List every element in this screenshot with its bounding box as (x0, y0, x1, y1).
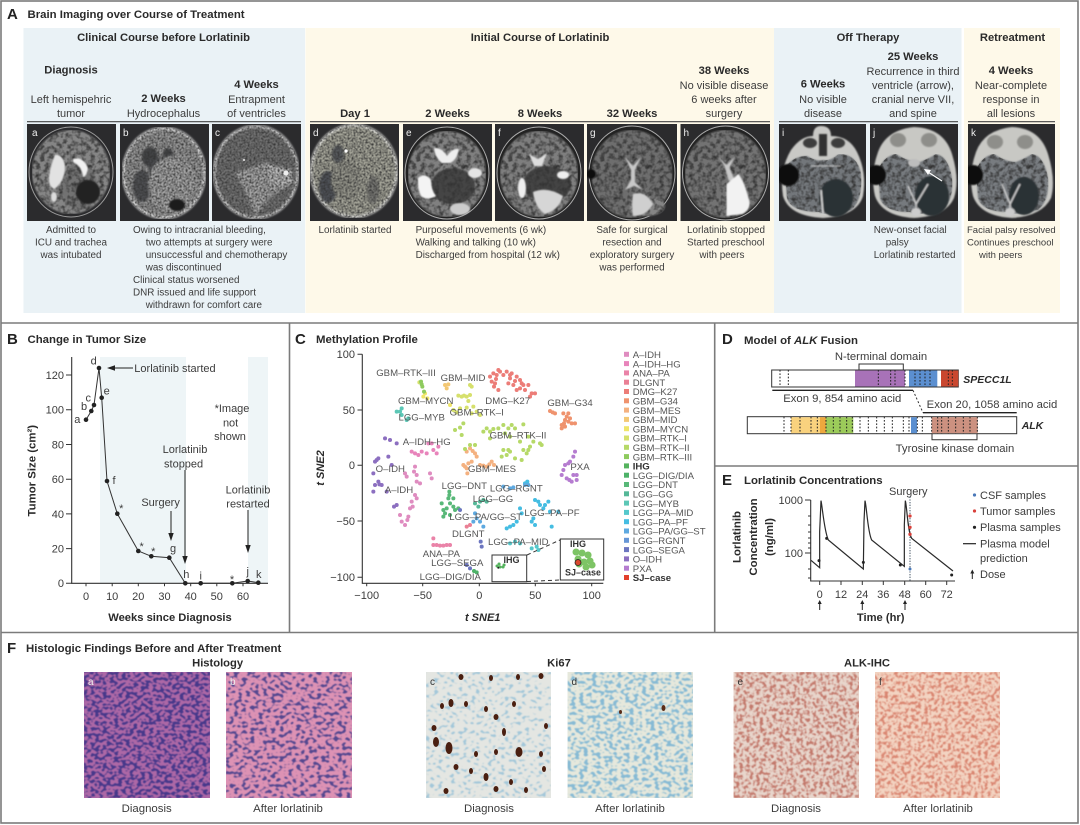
note: image not shown (214, 403, 249, 443)
line chart: tumor size over weeks: 20 (52, 544, 64, 556)
cluster labels: LGG–GG (473, 494, 513, 505)
legend: tumor classes: LGG–PA–PF (633, 517, 688, 528)
group titles: Ki67 (547, 658, 571, 670)
cluster labels: GBM–RTK–II (490, 430, 546, 442)
captions under scans: Lorlatinib restarted (874, 250, 955, 261)
panel F heading: Histologic Findings Before and After Treatment (26, 643, 281, 655)
line chart: tumor size over weeks: 80 (52, 440, 64, 452)
line chart: tumor size over weeks: 30 (158, 591, 171, 603)
micrograph a (84, 672, 210, 798)
column headers: 6 weeks after (691, 94, 757, 106)
legend: tumor classes: ANA–PA (633, 369, 670, 380)
cluster labels: GBM–RTK–I (450, 408, 504, 418)
annotation: lorlatinib restarted (226, 484, 270, 553)
line chart: tumor size over weeks: i (199, 570, 202, 582)
scan i (779, 124, 866, 221)
panel E: lorlatinib concentrations (722, 472, 1061, 624)
line chart: tumor size over weeks (46, 356, 268, 603)
micrograph b (226, 672, 352, 798)
panel B heading (7, 331, 146, 348)
shaded treatment periods (100, 357, 268, 583)
band: clinical course before lorlatinib (24, 28, 305, 313)
cluster labels: LGG–SEGA (431, 558, 484, 569)
line chart: tumor size over weeks: 0 (83, 591, 89, 603)
scatter plot axes: 50 (343, 405, 355, 417)
scan j with arrow: j (872, 128, 875, 139)
line chart: tumor size over weeks: f (112, 475, 116, 487)
legend: tumor classes: PXA (633, 564, 652, 575)
column headers: tumor (57, 108, 85, 120)
column headers: 6 Weeks (801, 78, 845, 90)
column headers: Near-complete (975, 80, 1047, 92)
line chart: tumor size over weeks: h (183, 569, 189, 581)
scan i: i (782, 128, 784, 139)
legend: tumor classes: SJ–case (633, 573, 671, 584)
cluster labels: DLGNT (452, 529, 485, 540)
note: image not shown: *Image (215, 403, 249, 415)
scatter plot axes: 100 (583, 590, 601, 602)
cluster labels (376, 368, 593, 583)
group titles: ALK-IHC (844, 658, 890, 670)
note: image not shown: not (223, 418, 238, 430)
panel B: change in tumor size (7, 331, 270, 624)
legend: sample types: prediction (980, 553, 1028, 565)
line chart: tumor size over weeks: 60 (52, 474, 64, 486)
captions under scans: unsuccessful and chemotherapy (146, 250, 287, 261)
scatter plot axes: 0 (476, 590, 482, 602)
captions under scans: withdrawn for comfort care (145, 300, 263, 311)
annotation: lorlatinib restarted: restarted (226, 498, 270, 510)
panel A heading: A (7, 6, 18, 23)
group titles: Histology (192, 658, 244, 670)
cluster labels: A–IDH–HG (403, 437, 451, 448)
N-terminal domain label and bracket (835, 351, 927, 370)
line chart: tumor size over weeks: 0 (58, 578, 64, 590)
legend: sample types: Tumor samples (980, 506, 1056, 518)
exon 9 label and fusion line (772, 390, 923, 413)
micrograph e: ALK-IHC diagnosis (734, 672, 859, 798)
captions under scans: DNR issued and life support (133, 288, 256, 298)
captions under scans: with peers (978, 250, 1023, 261)
legend: tumor classes (624, 350, 706, 584)
band: retreatment (964, 28, 1060, 313)
column headers: cranial nerve VII, (872, 94, 954, 106)
surgery label: Surgery (889, 486, 928, 498)
cluster labels: GBM–MES (468, 464, 516, 475)
tyrosine kinase domain label and bracket (896, 434, 1014, 455)
captions under scans: Owing to intracranial bleeding, (133, 225, 266, 236)
annotation: surgery: Surgery (141, 497, 180, 509)
scatter points by tumor class (373, 370, 577, 572)
concentration chart axes: 100 (785, 548, 803, 560)
line chart: tumor size over weeks: 10 (106, 591, 118, 603)
scan d: d (313, 128, 319, 139)
axis title: t SNE2: t SNE2 (315, 450, 327, 486)
line chart: tumor size over weeks: 20 (132, 591, 144, 603)
captions under scans: Continues preschool (967, 238, 1054, 248)
micrograph b: b (230, 677, 236, 688)
scatter plot axes: 0 (349, 460, 355, 472)
column headers: disease (804, 108, 842, 120)
scatter plot axes: 100 (337, 349, 355, 361)
scan f: f (498, 128, 501, 139)
column headers: Left hemispehric (31, 94, 112, 106)
band headings: Initial Course of Lorlatinib (471, 32, 609, 44)
scan j with arrow (870, 124, 958, 221)
captions under scans: Admitted to (46, 225, 96, 236)
inset: enlarged IHG with SJ-case: SJ–case (565, 568, 601, 578)
cluster labels: O–IDH (376, 464, 405, 475)
legend: tumor classes: GBM–MES (633, 406, 681, 417)
cluster labels: LGG–PA/GG–ST (449, 512, 522, 523)
cluster labels: LGG–PA–MID (488, 537, 549, 548)
column headers: Day 1 (340, 108, 370, 120)
scan e: e (406, 128, 412, 139)
note: image not shown: shown (214, 431, 246, 443)
captions under scans (35, 225, 1056, 311)
concentration chart axes: 0 (817, 589, 823, 601)
panel F: histologic findings (7, 640, 1001, 815)
band: off therapy (774, 28, 962, 313)
panel D: model of ALK fusion (722, 331, 1057, 455)
micrograph captions: Diagnosis (464, 803, 514, 815)
micrograph captions: After lorlatinib (595, 803, 665, 815)
captions under scans: Walking and talking (10 wk) (416, 238, 536, 248)
legend: sample types: CSF samples (980, 490, 1047, 502)
captions under scans: Purposeful movements (6 wk) (416, 225, 546, 236)
captions under scans: Lorlatinib stopped (687, 225, 765, 236)
legend: tumor classes: GBM–RTK–I (633, 434, 687, 445)
micrograph a: a (88, 677, 94, 688)
column headers: 2 Weeks (425, 108, 470, 120)
band: initial course of lorlatinib (306, 28, 774, 313)
captions under scans: was discontinued (145, 262, 221, 274)
ALK gene bar (747, 417, 1017, 434)
panel C heading: Methylation Profile (316, 334, 418, 346)
line chart: tumor size over weeks: * (119, 503, 124, 515)
concentration chart axes (779, 495, 955, 601)
panel E heading: E (722, 472, 732, 489)
column headers: of ventricles (227, 108, 286, 120)
band headings (77, 32, 1045, 44)
panel B heading: B (7, 331, 18, 348)
captions under scans: two attempts at surgery were (146, 238, 273, 248)
column headers (31, 51, 1047, 120)
scatter plot axes: −50 (413, 590, 432, 602)
column headers: surgery (706, 108, 743, 120)
annotation: lorlatinib restarted: Lorlatinib (226, 484, 270, 496)
captions under scans: ICU and trachea (35, 238, 107, 248)
cluster labels: PXA (570, 462, 590, 473)
inset: IHG cluster: IHG (504, 555, 520, 565)
captions under scans: resection and (602, 238, 662, 248)
scan k: k (971, 128, 977, 139)
line chart: tumor size over weeks: * (140, 541, 145, 553)
column headers: response in (983, 94, 1039, 106)
legend: tumor classes: LGG–GG (633, 490, 673, 500)
micrograph captions: Diagnosis (771, 803, 821, 815)
micrograph captions: After lorlatinib (253, 803, 323, 815)
panel C: methylation profile (295, 331, 706, 624)
legend: tumor classes: GBM–MYCN (633, 424, 688, 435)
scan g: g (590, 128, 596, 139)
legend: tumor classes: LGG–RGNT (633, 536, 686, 547)
cluster labels: GBM–MID (441, 373, 485, 384)
panel A heading (7, 6, 245, 23)
column headers: all lesions (987, 108, 1036, 120)
cluster labels: ANA–PA (423, 549, 460, 560)
concentration chart axes: 60 (920, 589, 932, 601)
line chart: tumor size over weeks: 60 (237, 591, 249, 603)
y axis title: (ng/ml) (764, 518, 776, 556)
captions under scans: was intubated (40, 250, 101, 261)
column headers: 32 Weeks (607, 108, 657, 120)
micrograph e: ALK-IHC diagnosis: e (738, 677, 744, 688)
column headers: Entrapment (228, 94, 285, 106)
panel C heading: C (295, 331, 306, 348)
legend: sample types (963, 490, 1061, 581)
band headings: Off Therapy (837, 32, 900, 44)
panel E heading (722, 472, 883, 489)
legend: sample types: Dose (980, 569, 1006, 581)
legend: tumor classes: GBM–G34 (633, 396, 679, 408)
y axis title (732, 498, 776, 576)
legend: sample types: Plasma model (980, 538, 1050, 550)
micrograph f: ALK-IHC after lorlatinib: f (879, 677, 882, 688)
axis title: weeks since diagnosis: Weeks since Diagnosis (108, 612, 232, 624)
scan g (587, 124, 677, 221)
cluster labels: DMG–K27 (485, 396, 530, 407)
cluster labels: GBM–RTK–III (376, 368, 436, 379)
scatter plot axes: −100 (330, 572, 355, 584)
cluster labels: GBM–G34 (547, 398, 593, 409)
scan e (403, 124, 492, 221)
column headers: ventricle (arrow), (872, 80, 954, 92)
tyrosine kinase domain label and bracket: Tyrosine kinase domain (896, 443, 1014, 455)
scan a (27, 124, 116, 221)
plasma model curve and samples (811, 497, 953, 581)
cluster labels: LGG–MYB (399, 412, 445, 424)
legend: tumor classes: IHG (633, 462, 650, 473)
captions under scans: Lorlatinib started (318, 225, 392, 236)
concentration chart axes: 36 (877, 589, 889, 601)
legend: tumor classes: O–IDH (633, 555, 662, 566)
cluster labels: LGG–RGNT (490, 484, 543, 494)
line chart: tumor size over weeks: * (151, 546, 156, 558)
captions under scans: Facial palsy resolved (967, 225, 1056, 236)
scatter plot axes: 50 (529, 590, 541, 602)
N-terminal domain label and bracket: N-terminal domain (835, 351, 927, 363)
line chart: tumor size over weeks: * (230, 574, 235, 586)
captions under scans: exploratory surgery (590, 250, 674, 261)
micrograph d: Ki67 after lorlatinib (568, 672, 693, 798)
column headers: No visible (799, 94, 847, 106)
y axis title: Concentration (748, 498, 760, 576)
legend: tumor classes: LGG–PA–MID (633, 508, 693, 519)
line chart: tumor size over weeks: 40 (52, 509, 64, 521)
annotation: lorlatinib stopped: Lorlatinib (163, 444, 207, 456)
y axis title: Lorlatinib (732, 511, 744, 563)
column headers: 8 Weeks (518, 108, 562, 120)
concentration chart axes: 24 (856, 589, 868, 601)
ALK gene name: ALK (1021, 420, 1045, 432)
legend: tumor classes: A–IDH–HG (633, 359, 681, 370)
line chart: tumor size over weeks: 40 (185, 591, 197, 603)
SPECC1L gene bar (772, 370, 958, 387)
legend: tumor classes: GBM–RTK–II (633, 443, 690, 454)
concentration chart axes: 12 (835, 589, 847, 601)
cluster labels: LGG–DNT (442, 481, 487, 492)
legend: tumor classes: DLGNT (633, 378, 665, 389)
captions under scans: Discharged from hospital (12 wk) (416, 250, 560, 261)
scan d (310, 124, 399, 221)
scan b (120, 124, 209, 221)
dose arrows on time axis (818, 600, 907, 610)
legend: tumor classes: GBM–RTK–III (633, 452, 692, 463)
annotation: surgery (141, 497, 180, 541)
captions under scans: with peers (698, 250, 744, 261)
line chart: tumor size over weeks: b (81, 401, 87, 413)
panel E heading: Lorlatinib Concentrations (744, 475, 883, 487)
scatter plot axes: −50 (336, 516, 355, 528)
scan h: h (684, 128, 689, 139)
column headers: 4 Weeks (234, 79, 279, 91)
line chart: tumor size over weeks: d (91, 356, 97, 368)
exon 20 label and line: Exon 20, 1058 amino acid (927, 399, 1057, 411)
band headings: Retreatment (980, 32, 1045, 44)
line chart: tumor size over weeks: e (104, 386, 110, 398)
inset: enlarged IHG with SJ-case: IHG (570, 539, 586, 549)
panel F heading (7, 640, 281, 657)
legend: tumor classes: A–IDH (633, 350, 661, 361)
band headings: Clinical Course before Lorlatinib (77, 32, 250, 44)
inset: enlarged IHG with SJ-case (560, 539, 604, 580)
captions under scans: Clinical status worsened (133, 275, 239, 286)
micrograph f: ALK-IHC after lorlatinib (875, 672, 1000, 798)
captions under scans: Safe for surgical (596, 225, 668, 236)
concentration chart axes: 72 (941, 589, 953, 601)
micrograph c: Ki67 diagnosis (426, 672, 551, 798)
column headers: 38 Weeks (699, 65, 749, 77)
legend: tumor classes: GBM–MID (633, 415, 678, 426)
scan c: c (215, 128, 220, 139)
scan f (495, 124, 584, 221)
axis title: tumor size: Tumor Size (cm²) (26, 425, 38, 516)
cluster labels: LGG–PA–PF (524, 508, 580, 519)
micrograph d: Ki67 after lorlatinib: d (572, 677, 577, 688)
panel A: brain imaging over course of treatment (7, 6, 1060, 313)
cluster labels: LGG–DIG/DIA (420, 572, 482, 583)
panel D heading: D (722, 331, 733, 348)
legend: tumor classes: LGG–DNT (633, 480, 678, 491)
line chart: tumor size over weeks: a (74, 414, 81, 426)
panel F heading: F (7, 640, 16, 657)
axis title: t SNE1: t SNE1 (465, 612, 500, 624)
micrograph c: Ki67 diagnosis: c (430, 677, 435, 688)
scan k (968, 124, 1055, 221)
micrograph captions: Diagnosis (122, 803, 172, 815)
concentration chart axes: 1000 (779, 495, 803, 507)
annotation: lorlatinib stopped (163, 444, 207, 564)
cluster labels: GBM–MYCN (398, 396, 453, 407)
column headers: Hydrocephalus (127, 108, 201, 120)
captions under scans: was performed (598, 262, 665, 274)
legend: tumor classes: LGG–PA/GG–ST (633, 527, 706, 538)
line chart: tumor size over weeks: 50 (211, 591, 223, 603)
line chart: tumor size over weeks: 100 (46, 404, 64, 416)
captions under scans: palsy (886, 238, 909, 248)
micrograph captions: After lorlatinib (903, 803, 973, 815)
scan c (212, 124, 301, 221)
line chart: tumor size over weeks: 120 (46, 370, 64, 382)
column headers: Diagnosis (44, 64, 98, 76)
column headers: No visible disease (680, 80, 768, 92)
column headers: 25 Weeks (888, 51, 938, 63)
legend: tumor classes: DMG–K27 (633, 387, 677, 398)
panel A heading: Brain Imaging over Course of Treatment (28, 9, 245, 21)
captions under scans: New-onset facial (874, 225, 947, 236)
column headers: Recurrence in third (867, 66, 959, 78)
legend: tumor classes: LGG–SEGA (633, 545, 686, 556)
inset: IHG cluster (492, 555, 527, 582)
micrograph captions (122, 803, 973, 815)
line chart: tumor size over weeks: j (245, 566, 249, 578)
time axis title: Time (hr) (857, 612, 905, 624)
panel B heading: Change in Tumor Size (28, 334, 146, 346)
legend: sample types: Plasma samples (980, 522, 1061, 534)
panel C heading (295, 331, 418, 348)
concentration chart axes: 48 (899, 589, 911, 601)
annotation: lorlatinib started: Lorlatinib started (134, 363, 216, 375)
line chart: tumor size over weeks: k (256, 569, 262, 581)
panel D heading: Model of ALK Fusion (744, 335, 858, 347)
scatter plot axes (330, 349, 603, 602)
scan b: b (123, 128, 129, 139)
cluster labels: A–IDH (385, 485, 413, 496)
exon 9 label and fusion line: Exon 9, 854 amino acid (783, 393, 901, 405)
legend: tumor classes: LGG–MYB (633, 499, 679, 510)
panel D heading (722, 331, 858, 348)
legend: tumor classes: LGG–DIG/DIA (633, 471, 695, 482)
captions under scans: Started preschool (687, 238, 764, 248)
line chart: tumor size over weeks: c (86, 392, 92, 404)
column headers: 4 Weeks (989, 65, 1033, 77)
annotation: lorlatinib stopped: stopped (164, 458, 203, 470)
group titles (192, 658, 890, 670)
scan a: a (32, 128, 38, 139)
column headers: 2 Weeks (141, 93, 186, 105)
scatter plot axes: −100 (354, 590, 379, 602)
scan h (680, 124, 770, 221)
SPECC1L gene name: SPECC1L (963, 374, 1012, 386)
line chart: tumor size over weeks: g (170, 543, 176, 555)
column headers: and spine (889, 108, 937, 120)
